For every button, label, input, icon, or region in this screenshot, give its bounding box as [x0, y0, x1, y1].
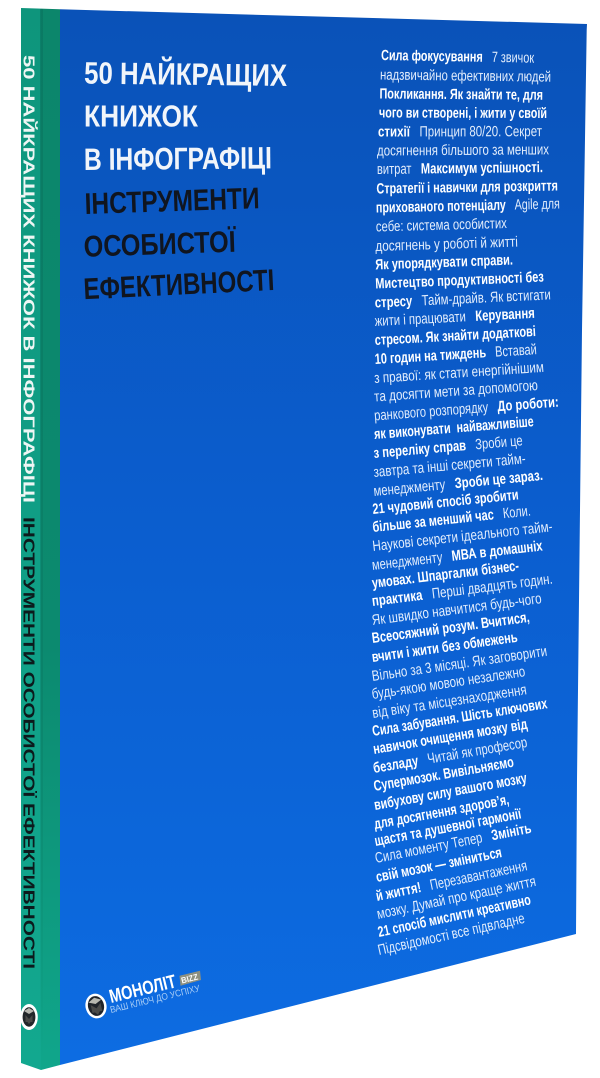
title: white — [84, 55, 288, 177]
text block: list of book titles: Всеосяжний розум. Вчитися, — [371, 610, 531, 647]
text block: list of book titles: для досягнення здоров’я, — [373, 792, 510, 833]
title: white: КНИЖОК — [84, 99, 198, 134]
text block: list of book titles: Сила фокусування 7 звичок — [381, 48, 535, 67]
text block: list of book titles: умовах. Шпаргалки бізнес- — [371, 558, 520, 592]
text block: list of book titles: прихованого потенціалу Agile для — [376, 197, 560, 216]
text block: list of book titles: менеджменту Зроби це зараз. — [373, 468, 544, 500]
text block: list of book titles: досягнень у роботі й житті — [375, 235, 518, 255]
title: white: 50 НАЙКРАЩИХ — [84, 55, 288, 93]
book spine — [20, 8, 60, 1070]
text block: list of book titles: Наукові секрети ідеального тайм- — [372, 519, 553, 555]
text block: list of book titles: 21 спосіб мислити креативно — [376, 892, 532, 941]
badge: BIZZ: BIZZ — [180, 972, 199, 985]
text block: list of book titles: 21 чудовий спосіб зробити — [372, 487, 519, 518]
text block: list of book titles: витрат Максимум успішності. — [377, 160, 543, 178]
text block: list of book titles: більше за менший час Коли. — [372, 503, 532, 536]
text block: list of book titles: Вільно за 3 місяці. Як заговорити — [371, 644, 548, 685]
publisher logo — [83, 971, 202, 1021]
text block: list of book titles: вчити і жити без обмежень — [371, 630, 519, 666]
text block: list of book titles: завтра та інші секрети тайм- — [373, 451, 526, 481]
spine title: white: 50 НАЙКРАЩИХ КНИЖОК В ІНФОГРАФІЦІ — [20, 55, 38, 503]
text block: list of book titles: вибухову силу вашого мозку — [373, 771, 529, 814]
title: white: В ІНФОГРАФІЦІ — [84, 140, 272, 177]
text block: list of book titles: від віку та місцезнаходження — [371, 682, 528, 722]
wordmark: МОНОЛІТ — [107, 971, 179, 1008]
text block: list of book titles: Як швидко навчитися будь-чого — [371, 591, 543, 629]
subtitle: black — [83, 182, 275, 306]
text block: list of book titles: практика Перші двадцять годин. — [371, 572, 554, 610]
spine subtitle: black: ІНСТРУМЕНТИ ОСОБИСТОЇ ЕФЕКТИВНОСТІ — [20, 517, 38, 969]
text block: list of book titles: стресу Тайм-драйв. Як встигати — [374, 287, 551, 311]
text block: list of book titles: Підсвідомості все підвладне — [376, 911, 526, 959]
text block: list of book titles: свій мозок — зміниться — [375, 845, 503, 886]
text block: list of book titles: стихії Принцип 80/20. Секрет — [378, 124, 542, 140]
text block: list of book titles: з переліку справ Зроби це — [373, 433, 523, 462]
text block: list of book titles: Сила моменту Тепер Змініть — [374, 821, 533, 867]
text block: list of book titles: щастя та душевної гармонії — [373, 806, 523, 850]
text block: list of book titles: Покликання. Як знайти те, для — [379, 87, 543, 104]
text block: list of book titles — [371, 48, 560, 959]
text block: list of book titles: ранкового розпорядку До роботи: — [374, 395, 559, 424]
text block: list of book titles: мозку. Думай про краще життя — [376, 874, 537, 923]
tagline: ВАШ КЛЮЧ ДО УСПІХУ — [109, 983, 202, 1016]
icon: spine logo — [20, 1004, 38, 1030]
subtitle: black: ЕФЕКТИВНОСТІ — [83, 264, 275, 306]
subtitle: black: ІНСТРУМЕНТИ — [84, 182, 260, 221]
text block: list of book titles: безладу Читай як професор — [372, 735, 528, 777]
text block: list of book titles: стресом. Як знайти додаткові — [374, 324, 536, 349]
text block: list of book titles: як виконувати найважливіше — [374, 414, 534, 443]
text block: list of book titles: жити і працювати Керування — [374, 306, 535, 330]
text block: list of book titles: себе: система особистих — [376, 216, 508, 235]
text block: list of book titles: та досягти мети за допомогою — [374, 378, 538, 405]
text block: list of book titles: надзвичайно ефективних людей — [380, 68, 551, 86]
text block: list of book titles: досягнення більшого за менших — [377, 142, 549, 159]
text block: list of book titles: Мистецтво продуктивності без — [375, 270, 544, 292]
icon: logo emblem — [83, 991, 109, 1021]
text block: list of book titles: 10 годин на тиждень Вставай — [374, 342, 537, 368]
subtitle: black: ОСОБИСТОЇ — [83, 226, 237, 264]
text block: list of book titles: Супермозок. Вивільняємо — [372, 755, 515, 795]
text block: list of book titles: навичок очищення мозку від — [372, 717, 529, 758]
text block: list of book titles: з правої: як стати енергійнішим — [374, 360, 544, 387]
text block: list of book titles: менеджменту МВА в домашніх — [371, 538, 544, 574]
text block: list of book titles: й життя! Перезавантаження — [375, 858, 529, 905]
text block: list of book titles: будь-якою мовою незалежно — [371, 664, 526, 703]
text block: list of book titles: Як упорядкувати справи. — [375, 253, 513, 273]
